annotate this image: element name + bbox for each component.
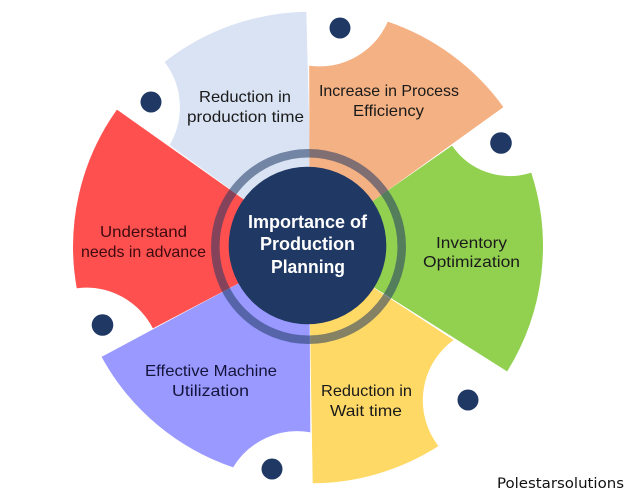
segment shape: green — [309, 146, 543, 371]
label: increase in process efficiency: Efficiency — [353, 103, 424, 120]
label: reduction in wait time: Wait time — [330, 403, 402, 420]
hub title: Importance of — [248, 212, 368, 232]
center hub — [229, 167, 386, 324]
panel: inventory optimization — [309, 146, 543, 371]
label: increase in process efficiency: Increase in Process — [319, 83, 459, 100]
label: inventory optimization: Optimization — [423, 254, 520, 271]
hub title: Production — [260, 234, 355, 254]
hub circle — [229, 167, 386, 324]
label: reduction in production time: Reduction in — [199, 89, 291, 106]
label: effective machine utilization: Utilization — [172, 383, 249, 400]
brand credit: Polestarsolutions — [497, 476, 624, 492]
hub title: Planning — [271, 257, 345, 277]
panel: understand needs in advance — [73, 110, 309, 328]
panel: effective machine utilization — [102, 246, 310, 467]
label: understand needs in advance: Understand — [100, 224, 187, 241]
decorative ring around hub — [215, 153, 402, 340]
icon: navy dots in notches — [92, 18, 512, 480]
segment shape: yellow — [309, 246, 453, 483]
segment shape: red — [73, 110, 309, 328]
label: reduction in production time: production time — [187, 109, 304, 126]
segment shape: lavender — [102, 246, 310, 467]
segment shape: pale blue — [165, 12, 310, 246]
label: inventory optimization: Inventory — [436, 235, 507, 252]
label: effective machine utilization: Effective Machine — [145, 363, 277, 380]
panel: reduction in wait time — [309, 246, 453, 483]
segment shape: orange — [310, 22, 503, 246]
label: understand needs in advance: needs in advance — [81, 244, 206, 261]
panel: reduction in production time — [165, 12, 310, 246]
panel: increase in process efficiency — [310, 22, 503, 246]
label: reduction in wait time: Reduction in — [321, 383, 412, 400]
